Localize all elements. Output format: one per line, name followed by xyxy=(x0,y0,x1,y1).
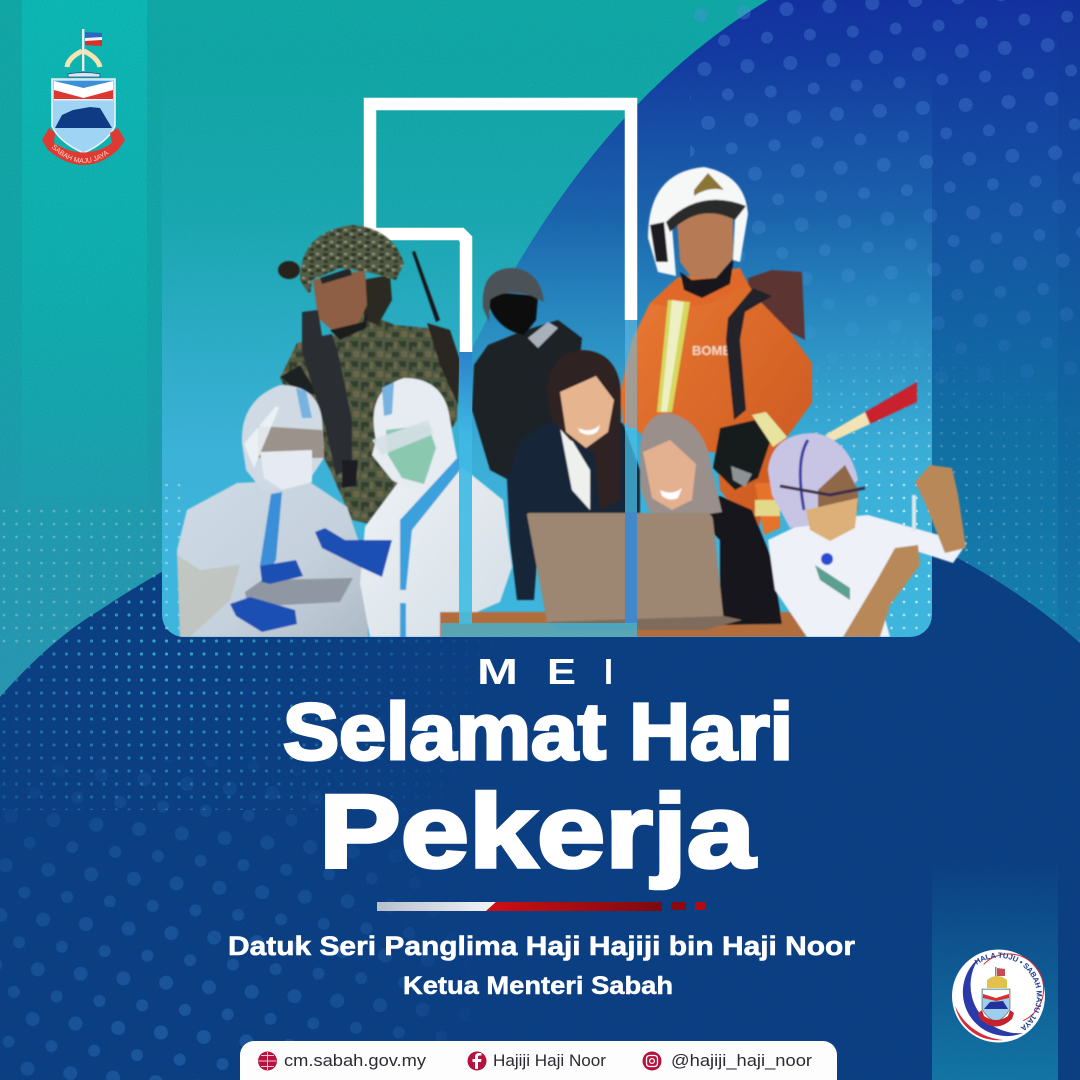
arms holding flag xyxy=(67,51,100,67)
name: Datuk Seri Panglima Haji Hajiji bin Haji Noor xyxy=(228,931,856,961)
translucent numeral 1 stems over people xyxy=(441,320,637,637)
firefighter backpack xyxy=(748,270,805,340)
month label: E xyxy=(547,651,576,692)
soldier helmet xyxy=(300,225,404,296)
month label: M xyxy=(477,651,518,692)
antenna xyxy=(412,251,440,322)
firefighter face xyxy=(677,212,733,278)
facebook: Hajiji Haji Noor xyxy=(493,1052,607,1070)
PPE worker right xyxy=(315,378,512,637)
nurse xyxy=(768,433,967,637)
motto ribbon xyxy=(42,128,125,165)
shield xyxy=(52,79,115,153)
flag xyxy=(82,29,102,71)
clipboard xyxy=(245,578,353,607)
heading: Selamat Hari: Selamat Hari xyxy=(283,687,793,776)
heading: Pekerja: Pekerja xyxy=(319,774,756,890)
desk xyxy=(440,612,806,637)
numeral 1 outline xyxy=(370,104,631,352)
red and white stick xyxy=(825,382,917,441)
firefighter: BOMB xyxy=(692,343,732,358)
role: Ketua Menteri Sabah xyxy=(403,972,673,1000)
month label: I xyxy=(604,651,613,692)
coat of arms of Sabah: SABAH MAJU JAYA xyxy=(52,144,109,164)
instagram: @hajiji_haji_noor xyxy=(671,1052,813,1070)
armed officer xyxy=(472,268,582,486)
month label xyxy=(477,651,613,692)
large blue circle xyxy=(462,0,1080,700)
PPE worker left xyxy=(177,385,368,637)
panel: photo backdrop xyxy=(162,131,932,637)
businesswoman xyxy=(507,350,640,600)
coat of arms of Sabah xyxy=(42,29,125,165)
people group xyxy=(177,167,967,637)
firefighter xyxy=(620,167,812,535)
laptop xyxy=(527,513,742,630)
woman in hijab xyxy=(640,413,782,625)
footer contact bar xyxy=(240,1041,837,1080)
soldier rifle xyxy=(302,310,352,476)
round emblem xyxy=(952,950,1045,1042)
firefighter glove xyxy=(713,420,770,490)
soldier face and gear xyxy=(362,275,392,325)
divider bar xyxy=(377,902,705,911)
website: cm.sabah.gov.my xyxy=(284,1052,427,1070)
navy lower shape xyxy=(0,523,1080,1080)
soldier xyxy=(278,225,460,530)
round emblem: HALA TUJU • SABAH MAJU JAYA xyxy=(974,952,1042,1030)
firefighter helmet xyxy=(648,167,748,276)
